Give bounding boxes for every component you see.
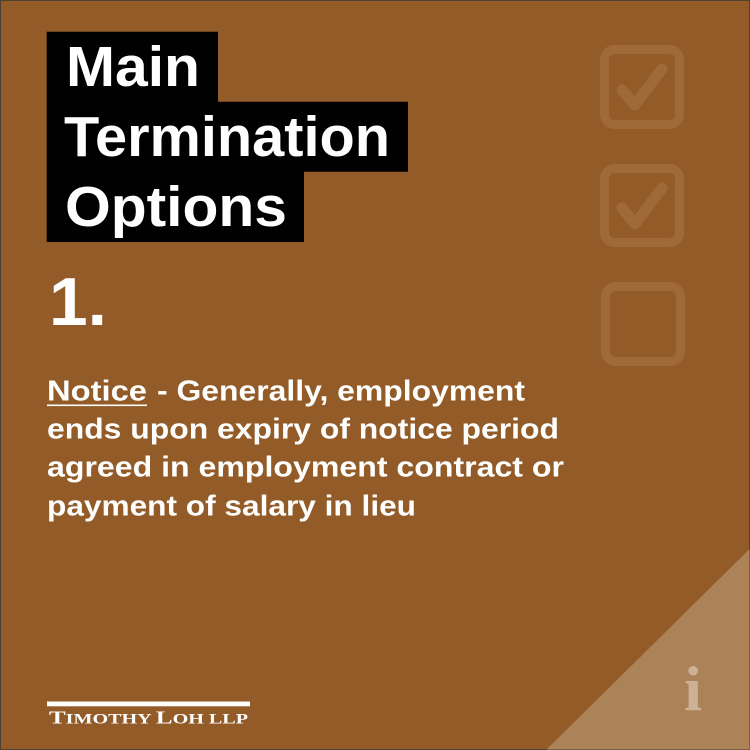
logo wordmark: T IMOTHY L OH LLP <box>49 708 248 728</box>
body line 3: agreed in employment contract or <box>47 452 564 484</box>
icon: checked box 2 <box>604 168 680 242</box>
corner info tab <box>547 549 750 750</box>
logo rule <box>47 702 250 706</box>
logo: Timothy Loh LLP <box>47 702 250 728</box>
body line 4: payment of salary in lieu <box>47 490 416 522</box>
body line 2: ends upon expiry of notice period <box>47 414 559 446</box>
body term: Notice: Notice <box>47 376 147 408</box>
icon: checklist <box>604 50 680 362</box>
body text <box>47 376 564 522</box>
icon: empty box <box>606 286 680 362</box>
step number: 1. <box>49 264 107 340</box>
title line: Termination: Termination <box>64 105 390 169</box>
corner triangle <box>547 549 750 750</box>
title block <box>47 32 408 242</box>
title line: Options: Options <box>65 175 287 239</box>
title line: Main: Main <box>66 35 200 99</box>
body line 1: - Generally, employment <box>157 376 526 408</box>
icon: checked box 1 <box>604 50 680 124</box>
icon: info letter: i <box>684 653 702 724</box>
title background <box>47 32 408 242</box>
